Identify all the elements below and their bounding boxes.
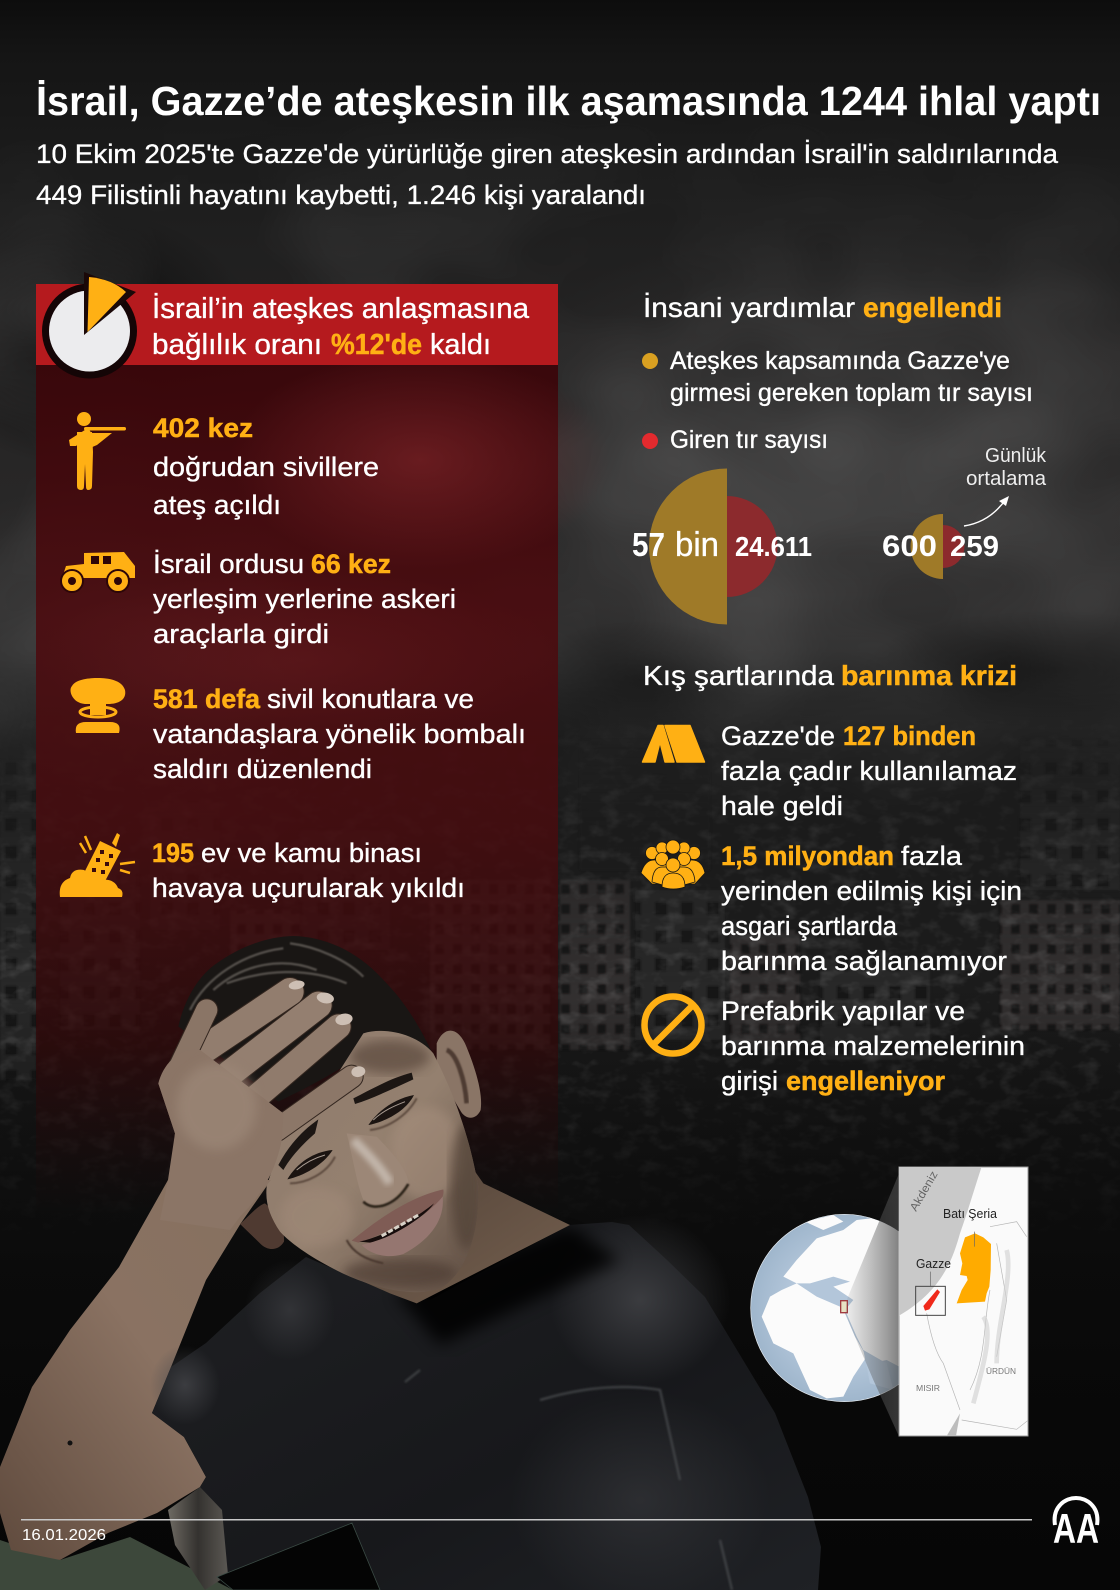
icon: mushroom cloud (71, 678, 125, 733)
item: 581 bombings: 581 defa (153, 684, 261, 714)
item: unusable tents (642, 721, 1017, 821)
section heading: aid blocked (643, 292, 1002, 323)
item: 402 civilians fired on: ateş açıldı (153, 490, 281, 520)
legend (642, 347, 1033, 454)
item: 66 military vehicle entries (61, 548, 456, 649)
map labels: MISIR (916, 1383, 940, 1393)
annotation: daily average: Günlük (985, 445, 1047, 467)
panel: red violations column (36, 350, 610, 1215)
item: displaced people: barınma sağlanamıyor (721, 946, 1007, 976)
footer rule (21, 1519, 1032, 1520)
photo: crying boy holding his forehead (0, 936, 821, 1590)
heading bar: compliance rate: kaldı (430, 329, 491, 361)
chart: total trucks comparison: 57 (632, 526, 665, 563)
logo: AA (1053, 1498, 1099, 1552)
item: 66 military vehicle entries: İsrail ordusu (153, 548, 304, 579)
icon: crowd (641, 840, 705, 889)
item: prefab entry blocked: girişi (721, 1066, 778, 1096)
subtitle (36, 138, 1059, 210)
item: displaced people: asgari şartlarda (721, 911, 898, 941)
icon: collapsing building (60, 833, 135, 897)
section heading: shelter crisis (643, 660, 1017, 691)
logo: AA: AA (1053, 1505, 1099, 1552)
chart: total trucks comparison: 24.611 (735, 531, 812, 562)
legend: girmesi gereken toplam tır sayısı (670, 379, 1033, 407)
neck (337, 1150, 570, 1303)
icon: armored vehicle (61, 552, 135, 592)
chart: daily average comparison: 259 (950, 531, 999, 563)
item: 581 bombings: vatandaşlara yönelik bombalı (153, 719, 526, 749)
item: prefab entry blocked: barınma malzemelerinin (721, 1031, 1025, 1061)
background: smoke over destroyed city (0, 49, 1120, 1192)
section heading: aid blocked: engellendi (863, 292, 1002, 323)
item: 195 buildings blown up: 195 (152, 838, 194, 868)
heading bar: compliance rate: İsrail’in ateşkes anlaşmasına (152, 292, 530, 325)
title: İsrail, Gazze’de ateşkesin ilk aşamasında 1244 ihlal yaptı (36, 78, 1101, 124)
legend: Giren tır sayısı (670, 426, 828, 454)
arm (0, 1180, 271, 1560)
item: unusable tents: hale geldi (721, 791, 843, 821)
right ear (437, 1031, 481, 1118)
item: prefab entry blocked (644, 996, 1025, 1096)
item: displaced people: 1,5 milyondan (721, 841, 894, 871)
item: unusable tents: 127 binden (843, 721, 976, 751)
inset map (899, 1167, 1028, 1436)
annotation: daily average: ortalama (966, 468, 1047, 490)
chart: total trucks comparison (632, 468, 812, 624)
heading bar: compliance rate: %12'de (331, 329, 422, 361)
item: prefab entry blocked: engelleniyor (786, 1066, 945, 1096)
item: 195 buildings blown up (60, 833, 465, 903)
item: 66 military vehicle entries: araçlarla girdi (153, 619, 329, 649)
map labels (908, 1169, 1016, 1393)
globe (750, 1214, 898, 1402)
item: 195 buildings blown up: havaya uçurularak yıkıldı (152, 873, 465, 903)
West Bank (957, 1233, 991, 1303)
mouth (352, 1189, 444, 1243)
shirt (152, 1222, 821, 1590)
item: 581 bombings: saldırı düzenlendi (153, 754, 372, 784)
item: 402 civilians fired on (69, 412, 379, 520)
heading bar: compliance rate: bağlılık oranı (152, 329, 322, 361)
subtitle: 449 Filistinli hayatını kaybetti, 1.246 kişi yaralandı (36, 180, 646, 210)
legend: Ateşkes kapsamında Gazze'ye (670, 347, 1010, 375)
item: unusable tents: Gazze'de (721, 721, 835, 751)
left ear (240, 1203, 284, 1249)
item: unusable tents: fazla çadır kullanılamaz (721, 756, 1017, 786)
item: 581 bombings: sivil konutlara ve (267, 684, 474, 714)
map labels: Gazze (916, 1256, 951, 1271)
chart: daily average comparison (882, 514, 999, 579)
subtitle: 10 Ekim 2025'te Gazze'de yürürlüğe giren ateşkesin ardından İsrail'in saldırılarında (36, 138, 1059, 169)
date: 16.01.2026 (22, 1527, 106, 1544)
plaid cloth (0, 1537, 233, 1590)
eyes and brows (353, 1073, 413, 1104)
icon: soldier with rifle (69, 412, 126, 490)
section heading: shelter crisis: Kış şartlarında (643, 660, 834, 691)
map labels: Batı Şeria (943, 1206, 998, 1221)
Gaza (923, 1289, 940, 1311)
heading bar: compliance rate (36, 284, 558, 365)
map: globe and Gaza locator (751, 1167, 1028, 1436)
item: 402 civilians fired on: 402 kez (153, 413, 253, 443)
icon: tent (642, 726, 704, 762)
face (266, 1031, 479, 1292)
icon: prohibited sign (644, 996, 702, 1054)
section heading: shelter crisis: barınma krizi (841, 660, 1017, 691)
item: displaced people (641, 840, 1022, 976)
section heading: aid blocked: İnsani yardımlar (643, 292, 855, 323)
hair (178, 936, 445, 1102)
chart: total trucks comparison: bin (675, 526, 719, 564)
projection cone (845, 1175, 898, 1435)
item: prefab entry blocked: Prefabrik yapılar ve (721, 996, 965, 1026)
fingernails (288, 979, 366, 1078)
item: 66 military vehicle entries: yerleşim yerlerine askeri (153, 584, 456, 614)
item: 66 military vehicle entries: 66 kez (311, 549, 391, 579)
item: displaced people: yerinden edilmiş kişi için (721, 876, 1022, 906)
map labels: ÜRDÜN (986, 1366, 1016, 1376)
item: 195 buildings blown up: ev ve kamu binası (201, 838, 422, 868)
nose (347, 1133, 408, 1207)
icon: pie clock 12 percent (42, 272, 137, 378)
annotation: daily average (964, 445, 1047, 526)
map labels: Akdeniz (908, 1169, 941, 1214)
striped towel and dark patch (168, 1487, 228, 1590)
item: 402 civilians fired on: doğrudan sivillere (153, 452, 379, 482)
head, drawn at 3x crop coordinates (158, 936, 570, 1303)
item: displaced people: fazla (901, 841, 963, 871)
hand (175, 992, 352, 1130)
chart: daily average comparison: 600 (882, 530, 937, 563)
item: 581 bombings (71, 678, 526, 784)
